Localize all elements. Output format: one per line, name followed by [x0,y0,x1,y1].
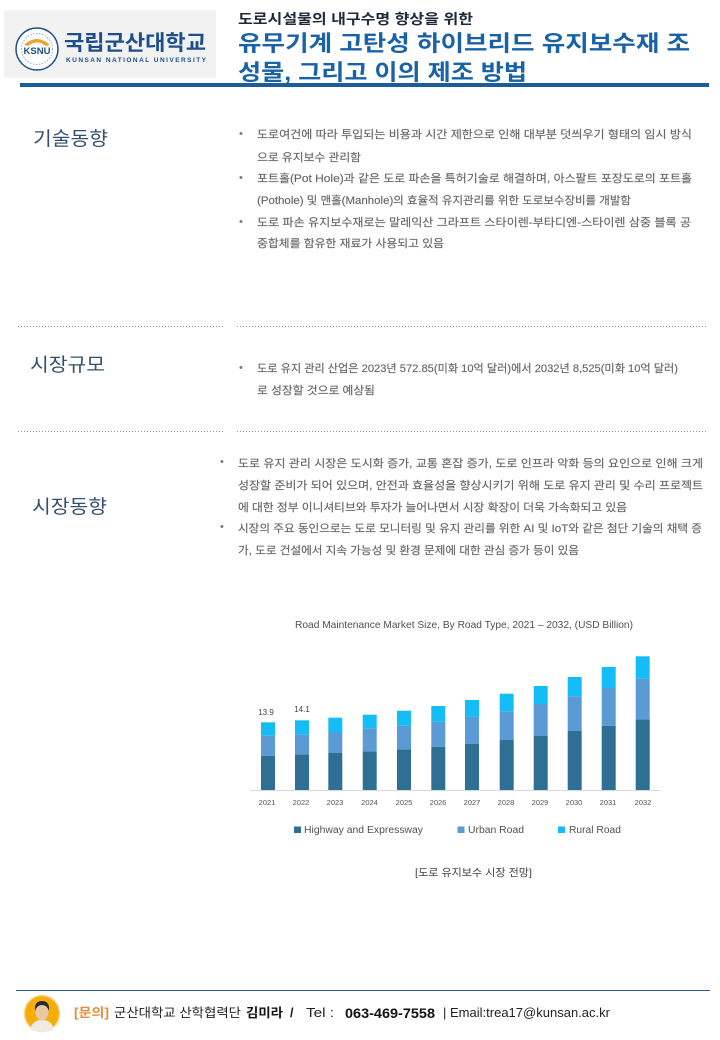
chart title: Road Maintenance Market Size, By Road Type, 2021 – 2032, (USD Billion) [295,619,633,631]
header title: 유무기계 고탄성 하이브리드 유지보수재 조 [238,31,690,56]
year axis labels: 2029 [532,798,548,807]
year axis labels: 2027 [464,798,480,807]
value labels: 14.1 [294,705,310,714]
contact information: Tel : [306,1006,334,1020]
heading: 시장동향: 시장동향 [32,496,107,518]
year axis labels: 2021 [259,798,275,807]
text block: 시장동향 bullets [220,456,703,557]
legend: Rural Road [569,825,621,836]
text block: 시장규모 bullet: 로 성장할 것으로 예상됨 [257,384,375,397]
contact information: [문의] [74,1006,109,1020]
year axis labels [259,798,651,807]
stacked bars [261,656,650,790]
header title: 도로시설물의 내구수명 향상을 위한 [238,11,473,27]
value labels: 13.9 [258,708,274,717]
contact information: 김미라 [246,1006,284,1020]
year axis labels: 2024 [361,798,378,807]
heading: 시장규모: 시장규모 [30,354,105,376]
text block: 시장규모 bullet [239,362,678,397]
text block: 기술동향 bullets: 포트홀(Pot Hole)과 같은 도로 파손을 특허기술로 해결하며, 아스팔트 포장도로의 포트홀 [257,171,692,185]
value labels [258,705,310,717]
header title: 성물, 그리고 이의 제조 방법 [238,60,527,85]
text block: 시장동향 bullets: 성장할 준비가 되어 있으며, 안전과 효율성을 향상시키기 위해 도로 유지 관리 및 수리 프로젝트 [238,478,703,492]
contact information [74,1006,610,1021]
text block: 시장규모 bullet: 도로 유지 관리 산업은 2023년 572.85(미화 10억 달러)에서 2032년 8,525(미화 10억 달러) [257,362,678,375]
logo panel [4,10,216,78]
chart caption: [도로 유지보수 시장 전망] [415,867,532,879]
bar chart: road maintenance market size [250,619,660,836]
year axis labels: 2026 [430,798,446,807]
logo wordmark: KUNSAN NATIONAL UNIVERSITY [66,57,207,64]
year axis labels: 2025 [396,798,412,807]
logo wordmark: 국립군산대학교 [64,32,206,55]
text block: 기술동향 bullets: (Pothole) 및 맨홀(Manhole)의 효율적 유지관리를 위한 도로보수장비를 개발함 [257,194,631,207]
text block: 시장동향 bullets: 도로 유지 관리 시장은 도시화 증가, 교통 혼잡 증가, 도로 인프라 악화 등의 요인으로 인해 크게 [238,456,703,470]
text block: 시장동향 bullets: 시장의 주요 동인으로는 도로 모니터링 및 유지 관리를 위한 AI 및 IoT와 같은 첨단 기술의 채택 증 [238,522,702,535]
contact information: 군산대학교 산학협력단 [114,1006,242,1020]
text block: 기술동향 bullets: • [239,172,243,184]
legend [294,825,621,836]
year axis labels: 2022 [293,798,309,807]
year axis labels: 2031 [600,798,616,807]
year axis labels: 2028 [498,798,514,807]
text block: 기술동향 bullets: 도로여건에 따라 투입되는 비용과 시간 제한으로 인해 대부분 덧씌우기 형태의 임시 방식 [257,127,692,141]
icon: university emblem: KSNU [24,46,51,57]
text block: 시장동향 bullets: 에 대한 정부 이니셔티브와 투자가 늘어나면서 시장 확장이 더욱 가속화되고 있음 [238,501,627,514]
icon: contact person avatar [24,996,60,1032]
contact information: 063-469-7558 [345,1006,436,1021]
text block: 시장규모 bullet: • [239,362,243,374]
year axis labels: 2032 [635,798,651,807]
text block: 기술동향 bullets: 으로 유지보수 관리함 [257,151,361,164]
icon: university emblem [16,28,58,70]
text block: 기술동향 bullets: 도로 파손 유지보수재로는 말레익산 그라프트 스타이렌-부타디엔-스타이렌 삼중 블록 공 [257,216,691,229]
heading: 기술동향: 기술동향 [33,128,108,150]
contact information: / [290,1006,294,1020]
legend: Highway and Expressway [304,825,423,836]
header title [238,11,690,85]
text block: 기술동향 bullets: 중합체를 함유한 재료가 사용되고 있음 [257,237,444,250]
contact information: | Email:trea17@kunsan.ac.kr [443,1006,610,1020]
text block: 기술동향 bullets: • [239,128,243,140]
logo wordmark [64,32,207,64]
year axis labels: 2023 [327,798,343,807]
text block: 기술동향 bullets: • [239,216,243,228]
legend: Urban Road [468,825,524,836]
year axis labels: 2030 [566,798,582,807]
text block: 기술동향 bullets [239,127,692,250]
text block: 시장동향 bullets: • [220,521,224,533]
text block: 시장동향 bullets: 가, 도로 건설에서 지속 가능성 및 환경 문제에 대한 관심 증가 등이 있음 [238,544,579,557]
text block: 시장동향 bullets: • [220,456,224,468]
